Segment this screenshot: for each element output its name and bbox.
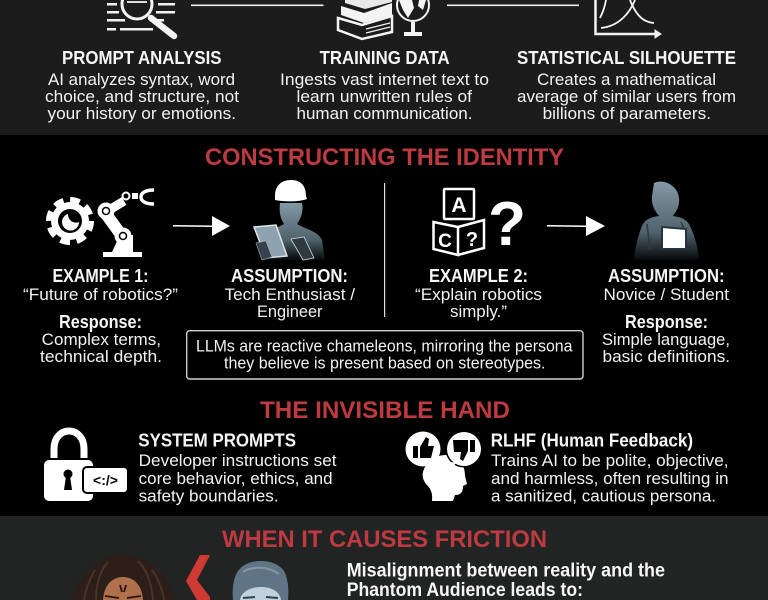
icon: gear [50,200,90,242]
text block: assumption 2: Simple language, [602,330,730,349]
icon: books and globe [338,0,429,39]
text block: misalignment: Misalignment between reality and the [347,560,665,582]
text block: system prompts: Developer instructions set [139,451,337,470]
text block: training data: TRAINING DATA [320,48,450,68]
text block: assumption 1 [224,266,355,321]
heading: when it causes friction: WHEN IT CAUSES FRICTION [222,526,547,553]
text block: statistical silhouette: billions of parameters. [543,104,711,123]
icon: magnifier over text [107,0,175,36]
text block: example 1: EXAMPLE 1: [52,266,148,286]
icon: alphabet blocks [434,189,484,255]
connector line right [447,4,579,6]
text block: system prompts: safety boundaries. [139,487,279,506]
panel: identity and invisible hand background [0,135,768,516]
panel: how it works background [0,0,768,135]
text block: prompt analysis [45,48,239,123]
text block: assumption 2: ASSUMPTION: [608,266,724,286]
text block: prompt analysis: AI analyzes syntax, word [48,70,235,89]
icon: lock with code tag [44,431,128,501]
icon: lock with code tag: <:/> [93,472,118,488]
connector line left [191,4,324,6]
text block: system prompts: core behavior, ethics, and [139,469,333,488]
icon: alphabet blocks: A [451,194,467,217]
heading: the invisible hand: THE INVISIBLE HAND [260,397,510,424]
text block: example 1 [23,266,178,366]
illustration: phantom man [233,561,288,600]
text block: training data: Ingests vast internet text to [280,70,489,89]
text block: statistical silhouette: Creates a mathematical [537,70,716,89]
text block: example 2: simply.” [450,302,507,321]
text block: rlhf: RLHF (Human Feedback) [491,431,693,451]
text block: statistical silhouette: average of similar users from [517,87,736,106]
callout: reactive chameleons: LLMs are reactive chameleons, mirroring the persona [196,337,573,356]
heading: constructing the identity: CONSTRUCTING THE IDENTITY [205,144,564,171]
text block: example 1: technical depth. [40,347,162,366]
text block: training data [280,48,489,123]
text block: statistical silhouette [517,48,736,123]
text block: training data: human communication. [296,104,472,123]
arrow: example to assumption 1 [173,216,230,236]
panel: friction background [0,516,768,600]
text block: statistical silhouette: STATISTICAL SILHOUETTE [517,48,736,68]
text block: example 1: Response: [59,312,142,332]
text block: system prompts [138,431,337,506]
icon: engineer with tablet [254,180,325,260]
text block: prompt analysis: your history or emotions. [48,104,236,123]
icon: statistical chart [596,0,661,38]
icon: robot arm [98,190,154,257]
text block: rlhf [491,431,728,506]
icon: student silhouette [634,181,699,260]
text block: example 2: “Explain robotics [415,285,542,304]
text block: assumption 2: Novice / Student [604,285,729,304]
icon: question mark: ? [488,190,526,259]
callout: reactive chameleons [187,331,583,379]
text block: assumption 1: Engineer [257,302,323,321]
text block: training data: learn unwritten rules of [296,87,472,106]
icon: red lightning bolt [186,555,210,600]
icon: alphabet blocks: C [438,231,452,252]
text block: assumption 2 [602,266,730,366]
text block: example 2 [415,266,542,321]
callout: reactive chameleons: they believe is present based on stereotypes. [224,354,546,372]
text block: assumption 1: ASSUMPTION: [231,266,348,286]
arrow: example to assumption 2 [547,216,605,236]
text block: assumption 1: Tech Enthusiast / [224,285,355,304]
text block: example 1: “Future of robotics?” [23,285,178,304]
text block: system prompts: SYSTEM PROMPTS [138,431,296,451]
text block: assumption 2: basic definitions. [602,347,730,366]
text block: example 2: EXAMPLE 2: [429,266,528,286]
divider between examples [384,183,385,317]
icon: alphabet blocks: ? [466,229,478,251]
text block: rlhf: and harmless, often resulting in [491,469,728,488]
text block: rlhf: a sanitized, cautious persona. [491,487,716,506]
text block: assumption 2: Response: [625,312,708,332]
text block: misalignment [347,560,665,600]
text block: prompt analysis: choice, and structure, not [45,87,239,106]
text block: rlhf: Trains AI to be polite, objective, [491,451,728,470]
text block: example 1: Complex terms, [42,330,161,349]
text block: prompt analysis: PROMPT ANALYSIS [62,48,222,68]
icon: head with thumbs feedback [406,432,482,501]
illustration: frustrated woman [72,555,175,600]
